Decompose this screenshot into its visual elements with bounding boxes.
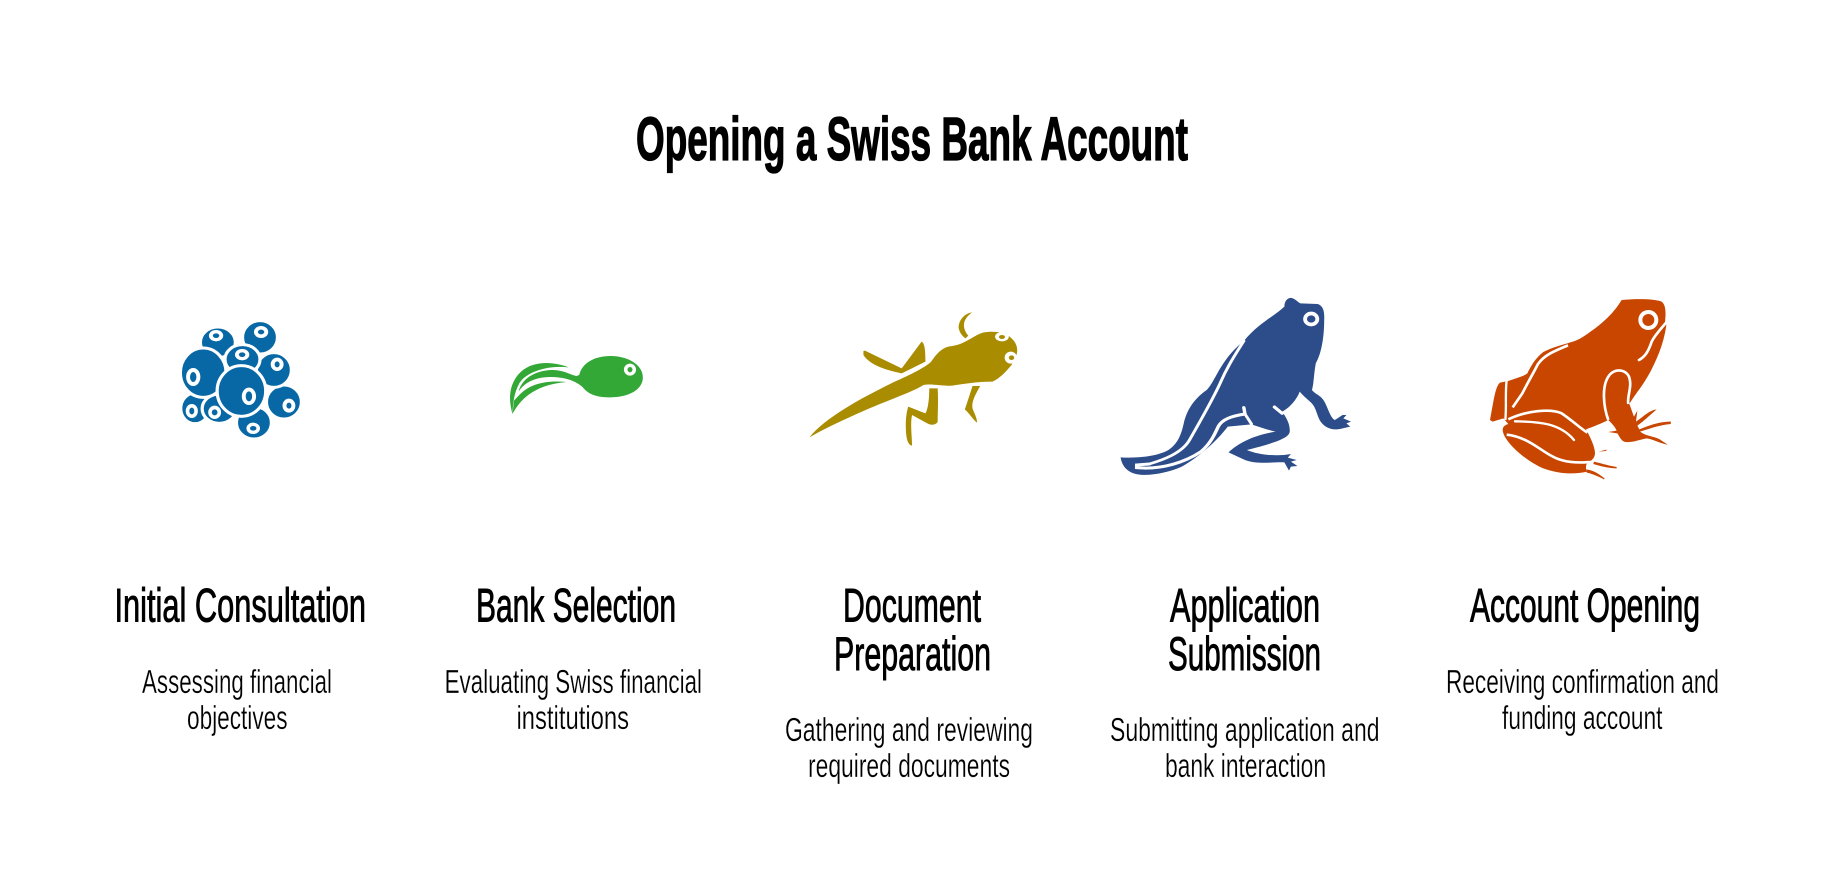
icon: frog eggs: [180, 321, 301, 439]
description: Gathering and reviewing: [785, 711, 1033, 748]
description: [785, 711, 1033, 784]
description: [142, 663, 332, 736]
panel: initial consultation: [114, 321, 366, 736]
heading: Application: [1170, 579, 1320, 632]
description: [1110, 711, 1380, 784]
icon: adult frog: [1490, 299, 1671, 479]
heading: Initial Consultation: [114, 579, 366, 632]
description: [1446, 663, 1719, 736]
description: Assessing financial: [142, 663, 332, 700]
icon: tadpole: [510, 356, 643, 414]
panel: bank selection: [445, 356, 702, 736]
panel: application submission: [1110, 298, 1380, 784]
panel: account opening: [1446, 299, 1719, 736]
description: bank interaction: [1165, 747, 1326, 784]
description: objectives: [187, 699, 288, 736]
title: Opening a Swiss Bank Account: [636, 105, 1188, 173]
description: institutions: [516, 699, 629, 736]
description: [445, 663, 702, 736]
heading: Account Opening: [1470, 579, 1700, 632]
heading: Preparation: [834, 627, 991, 680]
description: Evaluating Swiss financial: [445, 663, 702, 700]
heading: [1168, 579, 1321, 680]
icon: froglet with tail: [1121, 298, 1351, 475]
panel: document preparation: [785, 312, 1033, 784]
description: Submitting application and: [1110, 711, 1380, 748]
heading: [834, 579, 991, 680]
heading: Submission: [1168, 627, 1321, 680]
icon: tadpole with legs: [809, 312, 1017, 446]
description: required documents: [808, 747, 1010, 784]
heading: Document: [843, 579, 981, 632]
description: funding account: [1502, 699, 1662, 736]
heading: Bank Selection: [476, 579, 676, 632]
